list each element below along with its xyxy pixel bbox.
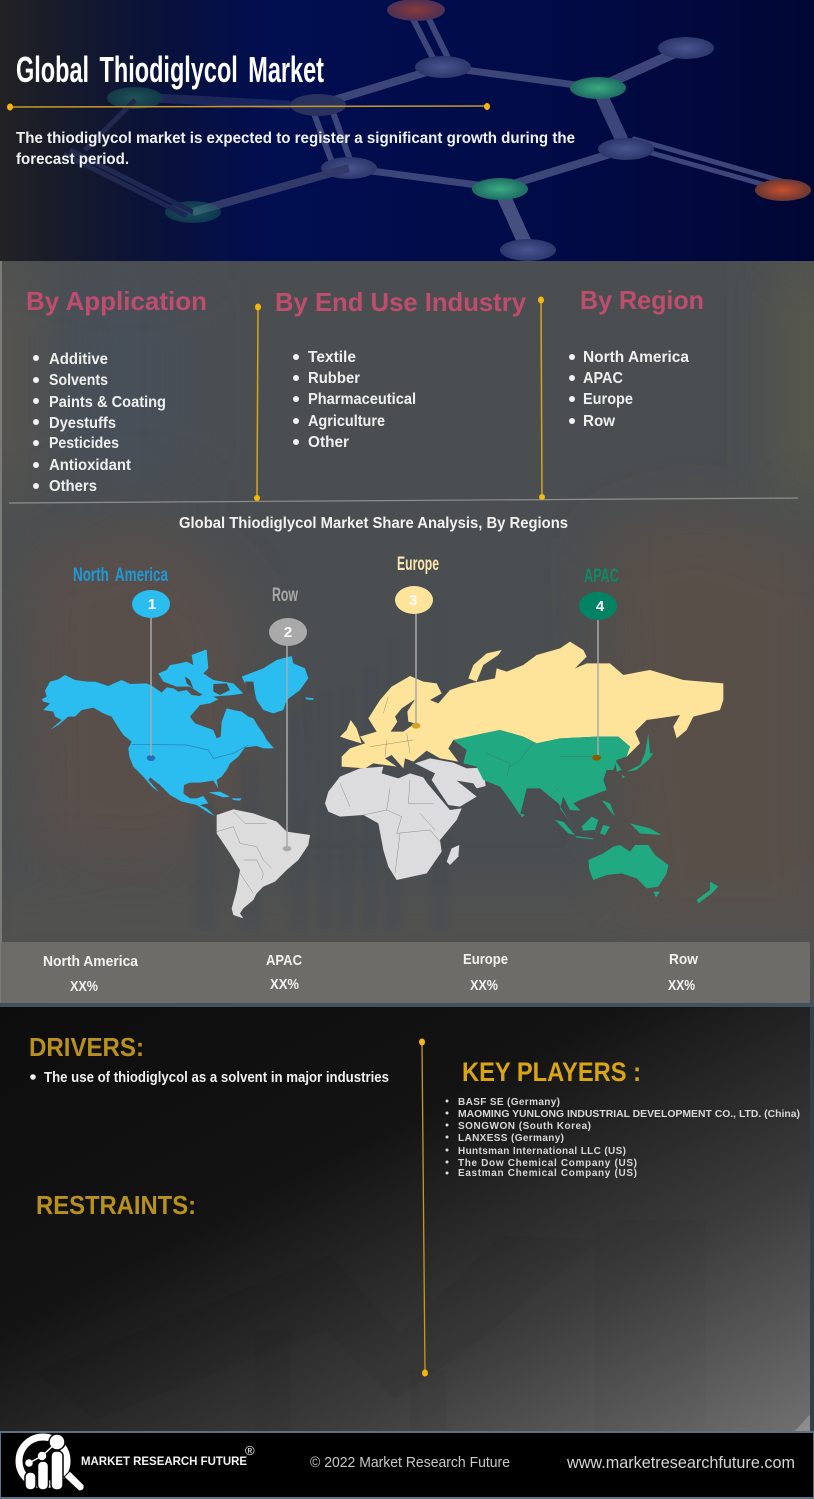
intro text xyxy=(16,130,575,168)
panel: regional share table: XX% xyxy=(470,978,498,994)
list: applications xyxy=(33,351,166,495)
molecule illustration xyxy=(64,0,811,261)
map: South America xyxy=(217,809,310,918)
divider: first column xyxy=(254,304,261,501)
icon: market research future logo xyxy=(19,1434,84,1491)
map: Europe and Russia xyxy=(340,642,723,768)
divider: second column xyxy=(538,296,545,500)
list: applications: Paints & Coating xyxy=(49,394,166,411)
map: Africa and Middle East xyxy=(325,758,486,880)
pin: Europe xyxy=(395,554,439,724)
intro text: forecast period. xyxy=(16,151,129,168)
list: applications: Pesticides xyxy=(49,435,119,452)
list: regions xyxy=(569,349,689,430)
heading: drivers: DRIVERS: xyxy=(29,1032,144,1062)
panel: regional share table: XX% xyxy=(70,979,98,995)
backdrop bars xyxy=(195,600,448,930)
heading: key players: KEY PLAYERS : xyxy=(462,1057,641,1087)
map: North America xyxy=(42,649,314,816)
panel: segments and map background xyxy=(0,261,814,1006)
list: end use industries xyxy=(293,349,416,451)
list: end use industries: Textile xyxy=(308,349,356,366)
list: applications: Additive xyxy=(49,351,108,368)
heading: restraints: RESTRAINTS: xyxy=(36,1190,196,1220)
pin: North America: 1 xyxy=(148,596,156,613)
list: key players: BASF SE (Germany) xyxy=(458,1097,560,1108)
pin: APAC: 4 xyxy=(596,598,605,615)
pin: Row: Row xyxy=(272,585,298,606)
list: applications: Others xyxy=(49,478,97,495)
panel: regional share table: XX% xyxy=(270,977,299,993)
brand name: MARKET RESEARCH FUTURE xyxy=(81,1456,247,1468)
copyright: © 2022 Market Research Future xyxy=(310,1454,510,1471)
panel: regional share table xyxy=(0,942,814,1007)
panel: regional share table: APAC xyxy=(266,953,302,969)
intro text: The thiodiglycol market is expected to register a significant growth during the xyxy=(16,130,575,147)
divider xyxy=(419,1038,428,1376)
list: end use industries: Pharmaceutical xyxy=(308,391,416,408)
panel: regional share table: Europe xyxy=(463,952,508,968)
pin: Europe: Europe xyxy=(397,554,439,575)
list: regions: Europe xyxy=(583,391,633,408)
panel: header banner xyxy=(0,0,814,261)
heading: By End Use Industry: By End Use Industry xyxy=(275,287,527,317)
list: applications: Antioxidant xyxy=(49,457,132,474)
list: key players xyxy=(446,1097,800,1179)
list: regions: North America xyxy=(583,349,689,366)
list: regions: Row xyxy=(583,413,616,430)
registered mark: ® xyxy=(245,1443,255,1458)
panel: footer xyxy=(0,1431,814,1499)
pin: North America xyxy=(73,565,170,756)
list: regions: APAC xyxy=(583,370,623,387)
list: key players: Eastman Chemical Company (US) xyxy=(458,1168,637,1179)
panel: regional share table: Row xyxy=(669,952,699,968)
list: key players: Huntsman International LLC (US) xyxy=(458,1146,626,1157)
list: key players: SONGWON (South Korea) xyxy=(458,1121,591,1132)
title: Global Thiodiglycol Market xyxy=(16,49,324,90)
heading: By Application: By Application xyxy=(26,286,207,316)
map heading: Global Thiodiglycol Market Share Analysis, By Regions xyxy=(179,515,568,532)
driver item: The use of thiodiglycol as a solvent in major industries xyxy=(44,1070,389,1086)
list: end use industries: Other xyxy=(308,434,349,451)
list: key players: The Dow Chemical Company (US) xyxy=(458,1158,637,1169)
list: key players: LANXESS (Germany) xyxy=(458,1133,564,1144)
world map xyxy=(42,642,723,918)
pin: North America: North America xyxy=(73,565,168,586)
panel: regional share table: North America xyxy=(43,954,139,970)
heading: By Region: By Region xyxy=(580,285,704,315)
map: Asia Pacific xyxy=(453,730,718,903)
title underline xyxy=(7,103,490,110)
list: end use industries: Agriculture xyxy=(308,413,385,430)
panel: drivers, restraints and key players xyxy=(0,1007,814,1431)
pin: Europe: 3 xyxy=(409,592,417,609)
list: end use industries: Rubber xyxy=(308,370,360,387)
panel: regional share table: XX% xyxy=(668,978,695,994)
pin: APAC xyxy=(579,566,619,755)
list: applications: Solvents xyxy=(49,372,108,389)
list: applications: Dyestuffs xyxy=(49,415,116,432)
pin: Row: 2 xyxy=(284,624,292,641)
list: key players: MAOMING YUNLONG INDUSTRIAL DEVELOPMENT CO., LTD. (China) xyxy=(458,1109,800,1120)
pin: Row xyxy=(269,585,307,847)
pin: APAC: APAC xyxy=(584,566,619,587)
website: www.marketresearchfuture.com xyxy=(566,1453,795,1472)
